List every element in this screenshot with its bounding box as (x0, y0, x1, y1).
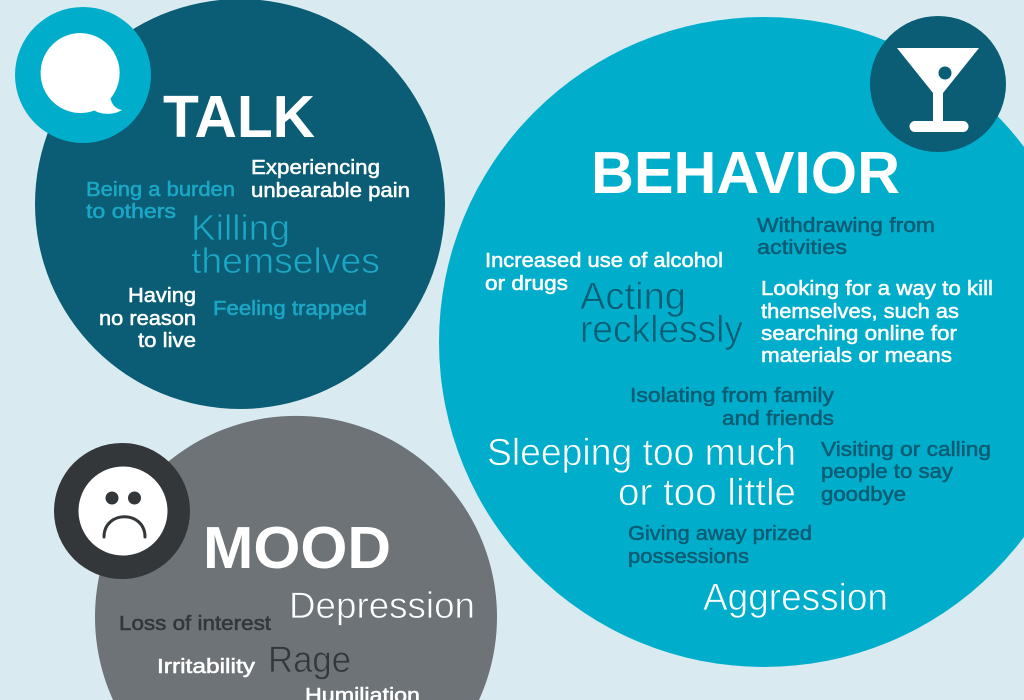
panel: talk (15, 0, 445, 409)
panel: mood (54, 416, 497, 700)
icon: martini glass (870, 16, 1006, 152)
text: withdrawing from activities: activities (757, 236, 847, 259)
text: looking for a way to kill themselves: searching online for (761, 322, 957, 345)
text: irritability: Irritability (157, 655, 256, 678)
icon: speech bubble (15, 7, 151, 143)
text: rage: Rage (268, 639, 351, 680)
text: looking for a way to kill themselves: themselves, such as (761, 300, 959, 323)
text: giving away prized possessions: possessions (628, 545, 749, 568)
text: aggression: Aggression (703, 577, 888, 619)
text: acting recklessly: recklessly (580, 309, 743, 351)
icon: sad face (54, 443, 190, 579)
text: isolating from family and friends: and friends (722, 407, 834, 430)
text: having no reason to live: Having (128, 284, 196, 307)
text: killing themselves: themselves (191, 240, 380, 281)
text: loss of interest: Loss of interest (119, 612, 271, 635)
text: being a burden to others: Being a burden (86, 178, 235, 201)
text: withdrawing from activities: Withdrawing from (757, 214, 935, 237)
text: experiencing unbearable pain: Experiencing (251, 156, 380, 179)
heading: mood: MOOD (203, 515, 391, 581)
text: increased use of alcohol or drugs: or drugs (485, 272, 568, 295)
heading: behavior: BEHAVIOR (591, 140, 900, 206)
text: being a burden to others: to others (86, 200, 176, 223)
text: isolating from family and friends: Isolating from family (630, 384, 835, 407)
text: giving away prized possessions: Giving away prized (628, 522, 812, 545)
text: visiting or calling people to say goodbye: Visiting or calling (821, 438, 991, 461)
text: visiting or calling people to say goodbye: people to say (821, 460, 954, 483)
text: visiting or calling people to say goodbye: goodbye (821, 483, 906, 506)
text: increased use of alcohol or drugs: Increased use of alcohol (485, 249, 723, 272)
text: experiencing unbearable pain: unbearable pain (251, 179, 410, 202)
text: depression: Depression (289, 585, 475, 626)
text: having no reason to live: no reason (99, 307, 196, 330)
text: sleeping too much or too little: or too little (618, 472, 796, 514)
text: acting recklessly: Acting (580, 276, 686, 318)
text: killing themselves: Killing (191, 207, 290, 248)
text: having no reason to live: to live (138, 329, 196, 352)
text: looking for a way to kill themselves: Looking for a way to kill (761, 277, 993, 300)
heading: talk: TALK (163, 84, 315, 150)
text: feeling trapped: Feeling trapped (213, 297, 367, 320)
text: looking for a way to kill themselves: materials or means (761, 344, 952, 367)
panel: behavior (439, 16, 1024, 667)
text: sleeping too much or too little: Sleeping too much (487, 432, 796, 474)
